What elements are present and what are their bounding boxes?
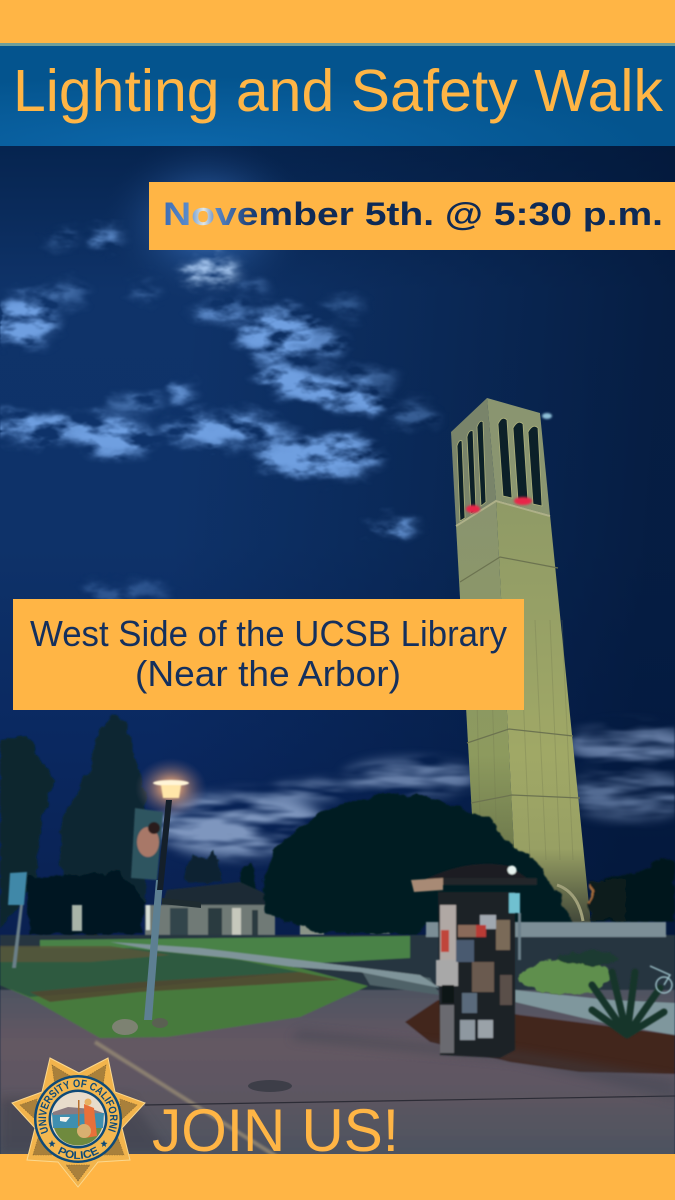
- police badge: POLICE: [58, 1146, 99, 1159]
- police badge: [11, 1057, 146, 1188]
- mulch bed: [405, 1000, 675, 1074]
- distant trees and building: [0, 715, 262, 950]
- concrete wall: [426, 922, 666, 937]
- clouds: [0, 229, 439, 598]
- hedge: [519, 951, 618, 994]
- right trees and pavilion: [590, 858, 675, 922]
- badge star: [12, 1058, 145, 1187]
- seal painting: [51, 1092, 105, 1146]
- footpath: [110, 942, 440, 988]
- bottom band: [0, 1154, 675, 1200]
- main lawn: [0, 946, 368, 1038]
- top band: [0, 0, 675, 43]
- kiosk light: [508, 866, 516, 874]
- posters: [436, 905, 512, 1053]
- bicycle: [650, 966, 672, 993]
- pavement: [0, 985, 675, 1156]
- rocks: [112, 1019, 138, 1035]
- pine tree: [60, 715, 146, 925]
- horizon clouds: [155, 725, 675, 857]
- moon glow: [102, 137, 312, 307]
- belfry: [451, 398, 550, 526]
- lamp glow: [135, 758, 207, 818]
- title: Lighting and Safety Walk: [13, 58, 663, 124]
- far left tree: [0, 736, 54, 930]
- pavement marks: [0, 1030, 675, 1165]
- dark low trees: [27, 872, 145, 935]
- header divider: [0, 43, 675, 46]
- campus building: [72, 882, 390, 939]
- star ornaments: [20, 1065, 137, 1181]
- banner: [131, 808, 163, 880]
- tower beacon: [542, 413, 552, 419]
- ground: [0, 922, 675, 1156]
- date box: [149, 182, 675, 250]
- left small sign post: [8, 872, 27, 968]
- red lights: [466, 497, 532, 513]
- location box: (Near the Arbor): [135, 653, 401, 694]
- tower shaft right face: [496, 500, 591, 925]
- lamp pole: [144, 880, 163, 1020]
- location text: West Side of the UCSB Library: [30, 613, 507, 654]
- kiosk column: [438, 892, 515, 1058]
- bell tower: [451, 398, 591, 925]
- blue sign: [509, 893, 520, 913]
- tower texture: [475, 620, 573, 860]
- title banner: [0, 46, 675, 146]
- utility cover: [248, 1080, 292, 1092]
- belfry ledge: [456, 501, 550, 526]
- palm plant: [592, 972, 664, 1035]
- street lamp with banner: [112, 758, 207, 1035]
- big rounded tree: [262, 793, 572, 935]
- join us text: JOIN US!: [152, 1097, 399, 1164]
- rear road: [0, 935, 675, 990]
- poster kiosk: [411, 864, 537, 1058]
- pine trunk: [85, 905, 97, 950]
- seal stars: [48, 1140, 108, 1147]
- lamp head: [153, 780, 189, 798]
- location box: [13, 599, 524, 710]
- belfry openings: [457, 418, 542, 521]
- seal ring: [34, 1075, 122, 1163]
- date text: November 5th. @ 5:30 p.m.: [163, 196, 663, 232]
- far lit lawn: [40, 936, 410, 964]
- night sky background photo: [0, 137, 675, 946]
- tower joints: [460, 557, 580, 803]
- lit path right: [515, 990, 675, 1035]
- kiosk roof: [412, 864, 537, 885]
- tower arch: [557, 885, 583, 921]
- tower shaft left face: [456, 500, 518, 925]
- direction sign: [162, 898, 201, 908]
